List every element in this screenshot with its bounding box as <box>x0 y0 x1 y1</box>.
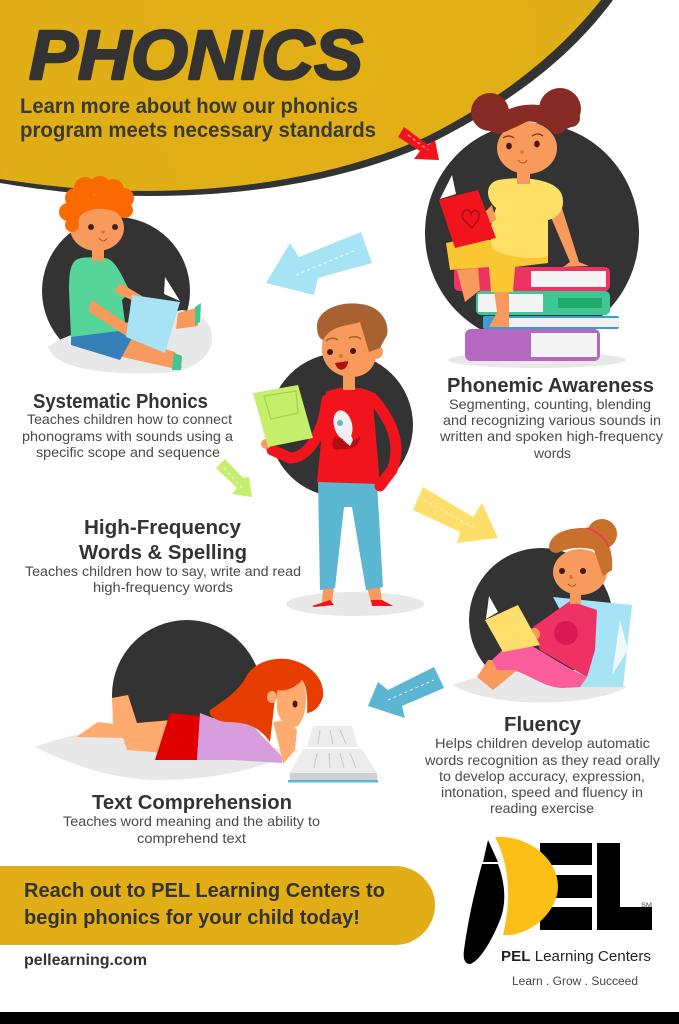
subtitle <box>20 94 376 142</box>
section: fluency: words recognition as they read orally <box>424 753 660 768</box>
subtitle: program meets necessary standards <box>20 118 376 142</box>
section: systematic phonics: Teaches children how to connect <box>27 412 232 427</box>
illustration: systematic phonics boy <box>42 176 212 373</box>
illustration: text comprehension girl with book <box>35 620 378 782</box>
section: high-frequency words and spelling <box>25 516 301 595</box>
illustration: phonemic awareness girl on books <box>425 88 639 368</box>
bottom bar <box>0 1012 679 1024</box>
logo: PEL Learning Centers: SM <box>641 903 652 909</box>
arrow: yellow <box>413 487 498 543</box>
section: phonemic awareness: Segmenting, counting, blending <box>449 397 651 412</box>
section: systematic phonics <box>22 390 233 460</box>
logo: PEL Learning Centers <box>464 837 652 988</box>
title: PHONICS <box>29 16 363 94</box>
call to action banner: Reach out to PEL Learning Centers to <box>24 880 385 902</box>
section: systematic phonics: specific scope and sequence <box>36 445 220 460</box>
arrow: red <box>398 127 439 160</box>
section: high-frequency words and spelling: High-Frequency <box>84 516 242 539</box>
section: phonemic awareness: written and spoken high-frequency <box>439 429 663 444</box>
section: systematic phonics: Systematic Phonics <box>33 390 208 413</box>
logo: PEL Learning Centers: Learn . Grow . Succeed <box>512 976 638 988</box>
section: phonemic awareness <box>439 374 663 461</box>
section: phonemic awareness: Phonemic Awareness <box>447 374 654 397</box>
section: text comprehension: comprehend text <box>137 831 246 846</box>
section: phonemic awareness: and recognizing various sounds in <box>443 413 661 428</box>
section: fluency <box>424 713 660 816</box>
illustration: fluency girl with pillow <box>453 519 632 703</box>
arrow: teal <box>368 667 444 718</box>
section: fluency: reading exercise <box>490 801 594 816</box>
section: fluency: Fluency <box>504 713 582 736</box>
section: text comprehension <box>63 791 320 846</box>
call to action banner: begin phonics for your child today! <box>24 907 360 929</box>
website url: pellearning.com <box>24 952 147 969</box>
section: high-frequency words and spelling: high-frequency words <box>93 580 233 595</box>
arrow: lime <box>216 459 252 497</box>
section: text comprehension: Teaches word meaning and the ability to <box>63 814 320 829</box>
arrow: light blue <box>266 232 372 295</box>
call to action banner <box>0 866 435 945</box>
section: fluency: intonation, speed and fluency in <box>441 785 643 800</box>
section: high-frequency words and spelling: Teaches children how to say, write and read <box>25 564 301 579</box>
illustration: reading boy standing <box>253 303 424 616</box>
subtitle: Learn more about how our phonics <box>20 94 358 118</box>
section: phonemic awareness: words <box>533 446 571 461</box>
section: fluency: Helps children develop automatic <box>435 736 650 751</box>
section: high-frequency words and spelling: Words & Spelling <box>79 541 247 564</box>
section: fluency: to develop accuracy, expression, <box>439 769 645 784</box>
header banner <box>0 0 613 196</box>
section: text comprehension: Text Comprehension <box>92 791 292 814</box>
section: systematic phonics: phonograms with sounds using a <box>22 429 233 444</box>
logo: PEL Learning Centers: PEL Learning Centers <box>501 949 651 965</box>
